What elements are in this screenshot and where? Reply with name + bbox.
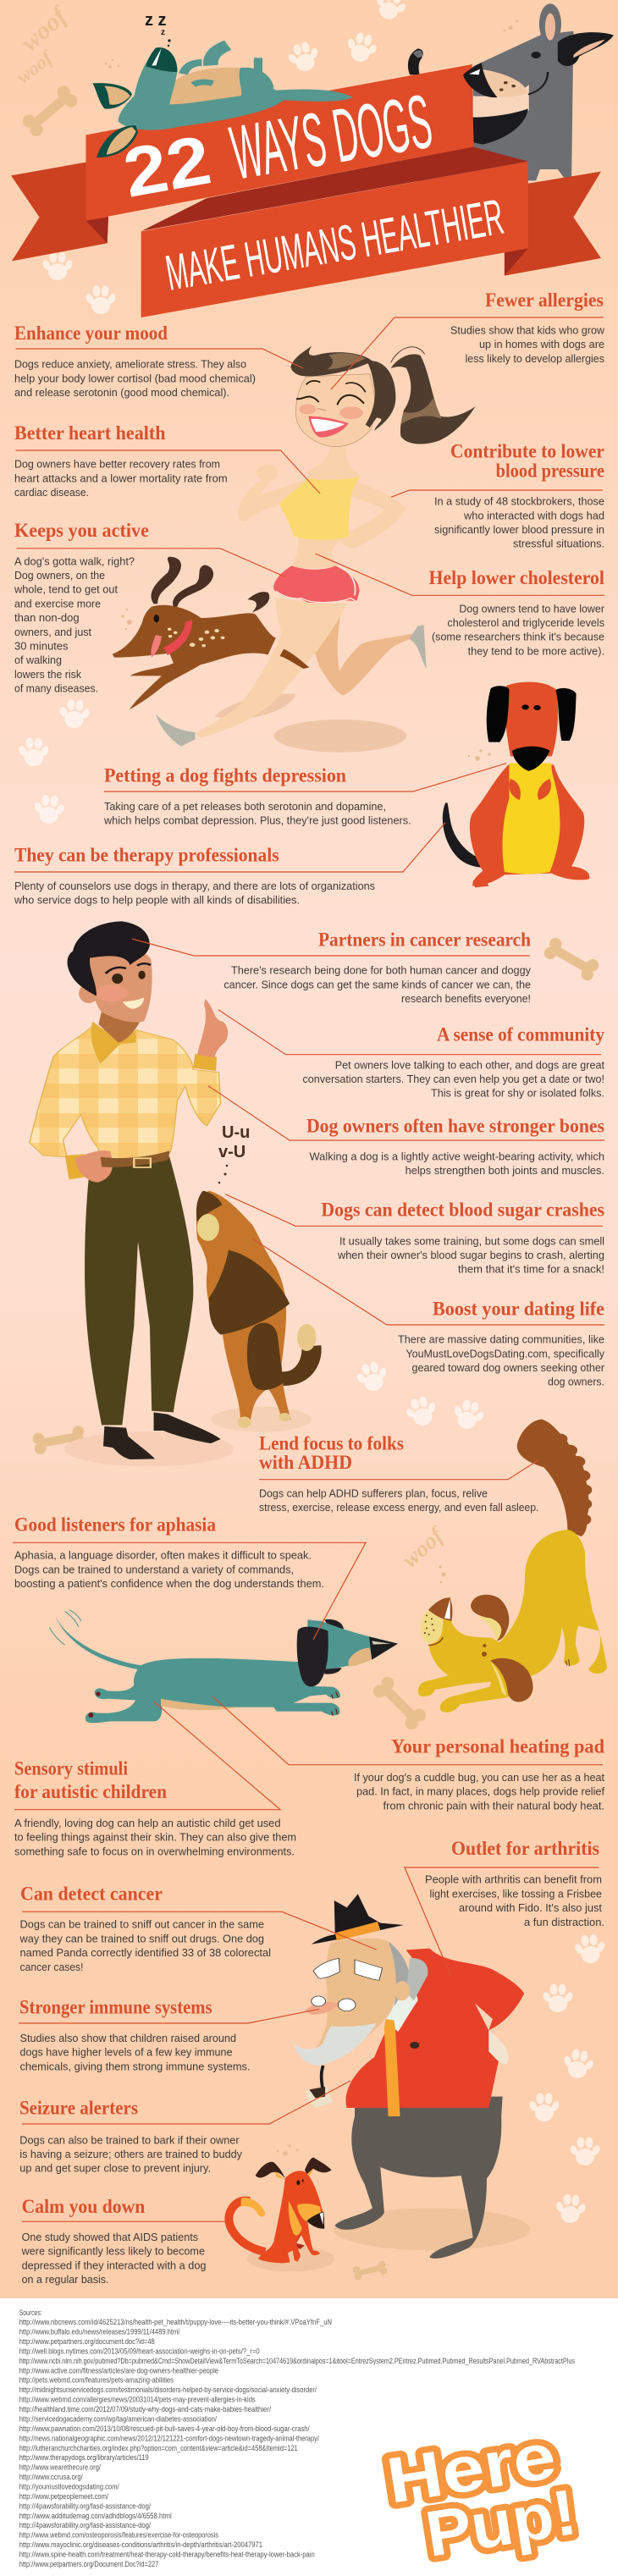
small dog ear inners	[273, 2169, 314, 2179]
collar	[91, 1022, 136, 1064]
section: contribute to lower blood pressure: Contribute to lower	[450, 441, 604, 462]
dog spots	[248, 1293, 272, 1318]
dog tail	[272, 1346, 312, 1379]
section: calm you down	[21, 2196, 225, 2286]
section: can detect cancer: Can detect cancer	[20, 1883, 163, 1904]
woof labels	[13, 1, 450, 1572]
section: boost your dating life: geared toward dog owners seeking other	[411, 1361, 605, 1374]
small dog body	[258, 2171, 324, 2263]
section: keeps you active: of many diseases.	[14, 682, 98, 695]
belt	[101, 1150, 169, 1167]
logo paw	[577, 2518, 597, 2535]
yellow dog tail	[517, 1420, 592, 1536]
illustration: teal dachshund	[49, 1610, 398, 1723]
illustration: man with plaid shirt	[30, 921, 234, 1466]
footer background	[0, 2298, 618, 2576]
logo: here pup	[382, 2420, 597, 2571]
hand on hip	[74, 1150, 113, 1183]
left ribbon tail	[11, 163, 108, 261]
logo word: here: Here	[382, 2420, 560, 2518]
section: stronger bones: helps strengthen both joints and muscles.	[406, 1164, 604, 1177]
section: can detect cancer: way they can be trained to sniff out drugs. One dog	[19, 1932, 264, 1944]
sleeping z letters: z	[161, 28, 165, 37]
section: can detect cancer	[19, 1883, 377, 1973]
illustration: yellow dog playing	[418, 1420, 607, 1713]
section: enhance your mood: Enhance your mood	[14, 323, 168, 344]
section: partners in cancer research: research benefits everyone!	[401, 992, 531, 1005]
section: enhance your mood: and release serotonin (good mood chemical).	[14, 386, 229, 399]
sources list: http://4pawsforability.org/fasd-assistance-dog/	[19, 2521, 151, 2530]
section: boost your dating life: YouMustLoveDogsDating.com, specifically	[406, 1347, 604, 1360]
sleeping z letters: z z	[145, 11, 167, 30]
section: your personal heating pad: Your personal heating pad	[391, 1736, 604, 1757]
eyes	[112, 974, 123, 984]
yellow dog body and head	[418, 1530, 607, 1713]
section: seizure alerters: Dogs can also be trained to bark if their owner	[19, 2133, 240, 2146]
dachshund front ear	[297, 1627, 328, 1686]
section: boost your dating life: dog owners.	[548, 1376, 604, 1388]
woof labels: woof	[13, 46, 58, 88]
decorative dots	[105, 19, 519, 2156]
section: keeps you active: Keeps you active	[14, 520, 149, 541]
section: lend focus to folks with adhd: Lend focus to folks	[259, 1432, 404, 1453]
head and ponytail	[290, 345, 476, 472]
section: outlet for arthritis: around with Fido. It's also just	[459, 1901, 602, 1914]
section: they can be therapy professionals: who service dogs to help people with all kinds of disabilities.	[14, 894, 300, 907]
title: 22: 22	[118, 121, 217, 212]
sources list: http://www.buffalo.edu/news/releases/1999/11/4489.html	[19, 2328, 179, 2337]
section: they can be therapy professionals	[14, 823, 445, 907]
bottom ribbon	[141, 162, 528, 317]
illustration: running brown dog	[113, 557, 309, 709]
old man pipe and hand	[322, 2066, 323, 2093]
section: sensory stimuli for autistic children: for autistic children	[14, 1781, 167, 1802]
section: outlet for arthritis: a fun distraction.	[524, 1916, 604, 1928]
section: good listeners for aphasia: Dogs can be trained to understand a variety of commands,	[14, 1563, 294, 1575]
section: calm you down: Calm you down	[22, 2196, 145, 2217]
icon: gray dog behind the banner	[408, 3, 614, 181]
section: contribute to lower blood pressure: significantly lower blood pressure in	[434, 523, 604, 536]
section: they can be therapy professionals: Plenty of counselors use dogs in therapy, and there are lots of organizations	[14, 880, 375, 892]
section: boost your dating life: There are massive dating communities, like	[398, 1333, 604, 1346]
section: enhance your mood	[14, 323, 303, 399]
sources list: http://www.spine-health.com/treatment/heat-therapy-cold-therapy/benefits-heat-therapy-lower-back-pain	[19, 2550, 315, 2560]
section: your personal heating pad: from chronic pain with their natural body heat.	[383, 1799, 604, 1812]
section: seizure alerters: up and get super close to prevent injury.	[19, 2162, 211, 2175]
section: help lower cholesterol: Dog owners tend to have lower	[459, 602, 605, 615]
section: petting a dog fights depression: Petting a dog fights depression	[104, 764, 346, 786]
small dog nose	[306, 2211, 324, 2229]
section: boost your dating life	[252, 1238, 605, 1388]
dog shadow	[212, 1407, 312, 1432]
section: keeps you active: than non-dog	[14, 611, 80, 624]
section: outlet for arthritis: light exercises, like tossing a Frisbee	[430, 1887, 602, 1900]
sleeping z letters	[145, 11, 171, 47]
small dog shadow	[247, 2246, 334, 2271]
section: help lower cholesterol	[315, 554, 605, 657]
dog paws	[238, 1416, 251, 1428]
section: better heart health	[14, 422, 320, 499]
sources list: http://www.petpartners.org/Document.Doc?id=227	[19, 2560, 158, 2569]
section: sensory stimuli for autistic children	[14, 1702, 296, 1857]
section: better heart health: cardiac disease.	[14, 486, 89, 499]
dachshund belly	[161, 1699, 237, 1710]
dachshund muzzle	[349, 1648, 372, 1666]
section: keeps you active: 30 minutes	[14, 640, 69, 652]
sources list: http://midnightsunservicedogs.com/testimonials/disorders-helped-by-service-dogs/social-anxiety-disorder/	[19, 2386, 317, 2395]
section: enhance your mood: Dogs reduce anxiety, ameliorate stress. They also	[14, 358, 246, 371]
dachshund paw marks	[88, 1691, 338, 1718]
section: contribute to lower blood pressure: In a study of 48 stockbrokers, those	[434, 495, 604, 508]
section: can detect cancer: named Panda correctly identified 33 of 38 colorectal	[20, 1946, 271, 1959]
sources list: http://www.webmd.com/osteoporosis/features/exercise-for-osteoporosis	[19, 2531, 218, 2540]
section: good listeners for aphasia: Good listeners for aphasia	[14, 1514, 216, 1535]
section: stronger bones: Dog owners often have stronger bones	[306, 1115, 604, 1136]
section: keeps you active: Dog owners, on the	[14, 569, 105, 582]
section: can detect cancer: cancer cases!	[20, 1961, 83, 1973]
logo word: pup: Pup!	[421, 2476, 581, 2571]
section: a sense of community	[218, 1010, 604, 1100]
banner ribbons	[11, 64, 601, 317]
section: seizure alerters: is having a seizure; others are trained to buddy	[19, 2148, 242, 2160]
sources list: http://www.mayoclinic.org/diseases-conditions/arthritis/in-depth/arthritis/art-20047971	[19, 2540, 262, 2550]
small dog ear flap	[289, 2201, 302, 2236]
small dog ears	[256, 2157, 332, 2178]
section: lend focus to folks with adhd: Dogs can help ADHD sufferers plan, focus, relive	[259, 1487, 488, 1499]
section: blood sugar crashes	[225, 1194, 604, 1276]
section: help lower cholesterol: they tend to be more active).	[468, 644, 604, 657]
section: sensory stimuli for autistic children: Sensory stimuli	[14, 1758, 129, 1779]
sources list: http://pets.webmd.com/features/pets-amazing-abilities	[19, 2376, 174, 2386]
section: calm you down: depressed if they interacted with a dog	[22, 2259, 206, 2271]
section: contribute to lower blood pressure: stressful situations.	[513, 538, 604, 550]
sniff marks	[218, 1123, 250, 1183]
section: stronger immune systems	[19, 1996, 319, 2072]
dachshund back ear pieces	[324, 1619, 344, 1674]
section: a sense of community: Pet owners love talking to each other, and dogs are great	[335, 1058, 604, 1071]
woof labels: woof	[16, 1, 74, 57]
section: stronger immune systems: Stronger immune systems	[19, 1996, 212, 2017]
dachshund tail	[55, 1615, 141, 1670]
illustration: sniffing dog	[196, 1191, 316, 1432]
small dog tail	[229, 2201, 265, 2252]
section: good listeners for aphasia: Aphasia, a language disorder, often makes it difficult to speak.	[14, 1549, 312, 1562]
old man trousers and legs	[335, 2097, 503, 2259]
illustration: sitting red dog	[443, 682, 589, 887]
dachshund nose	[369, 1636, 398, 1660]
connecting fold	[142, 146, 528, 231]
section: stronger bones: Walking a dog is a lightly active weight-bearing activity, which	[310, 1150, 604, 1162]
old man beard	[294, 2023, 377, 2066]
section: blood sugar crashes: them that it's time for a snack!	[458, 1263, 604, 1276]
left ribbon fold	[86, 218, 108, 243]
section: calm you down: on a regular basis.	[22, 2273, 109, 2286]
section: partners in cancer research	[132, 929, 531, 1005]
old man hat	[312, 1894, 404, 1944]
title	[118, 80, 507, 301]
sources list: http://well.blogs.nytimes.com/2013/05/09/heart-association-weighs-in-on-pets/?_r=0	[19, 2347, 260, 2356]
icon: gray dog muzzle	[463, 63, 548, 145]
section: partners in cancer research: cancer. Since dogs can get the same kinds of cancer we can, the	[223, 978, 531, 990]
illustration: jogging woman	[156, 345, 476, 753]
section: fewer allergies: up in homes with dogs are	[479, 338, 604, 350]
section: a sense of community: A sense of community	[437, 1023, 604, 1045]
section: fewer allergies: Fewer allergies	[485, 290, 604, 311]
section: fewer allergies	[331, 290, 605, 389]
section: sensory stimuli for autistic children: to feeling things against their skin. They can also give them	[14, 1831, 296, 1844]
right ribbon fold	[505, 248, 528, 276]
section: calm you down: One study showed that AIDS patients	[22, 2231, 198, 2243]
sources list: http://lutheranchurchcharities.org/index.php?option=com_content&view=article&id=458&Itemid=121	[19, 2444, 298, 2453]
top ribbon	[86, 64, 474, 221]
section: blood sugar crashes: It usually takes some training, but some dogs can smell	[339, 1234, 604, 1247]
section: outlet for arthritis: Outlet for arthritis	[451, 1838, 599, 1859]
sources list: http://www.additudemag.com/adhdblogs/4/6558.html	[19, 2512, 172, 2521]
dachshund head	[307, 1619, 398, 1669]
section: better heart health: Dog owners have better recovery rates from	[14, 458, 220, 471]
sources list: http://www.pawnation.com/2013/10/08/rescued-pit-bull-saves-4-year-old-boy-from-blood-sugar-crash/	[19, 2424, 310, 2434]
section: contribute to lower blood pressure: blood pressure	[496, 460, 604, 481]
section: seizure alerters: Seizure alerters	[19, 2098, 138, 2119]
sources list: http://www.nbcnews.com/id/4625213/ns/health-pet_health/t/puppy-love----its-better-you-think/#.VPoaYfnF_uN	[19, 2318, 332, 2327]
section: petting a dog fights depression	[103, 764, 506, 827]
section: sensory stimuli for autistic children: A friendly, loving dog can help an autistic child get used	[14, 1817, 281, 1829]
section: outlet for arthritis	[405, 1838, 604, 1977]
section: seizure alerters	[19, 2081, 350, 2175]
old man shadow	[333, 2208, 530, 2250]
shoes	[103, 1426, 155, 1459]
sources list: http://www.active.com/fitness/articles/are-dog-owners-healthier-people	[19, 2366, 218, 2375]
section: stronger immune systems: dogs have higher levels of a few key immune	[20, 2046, 232, 2059]
section: blood sugar crashes: Dogs can detect blood sugar crashes	[321, 1200, 604, 1221]
old man shirt and tie	[384, 1987, 417, 2032]
old man nose and glasses	[306, 2002, 339, 2015]
sources list: http://healthland.time.com/2012/07/09/study-why-dogs-and-cats-make-babies-healthier/	[19, 2405, 271, 2414]
section: contribute to lower blood pressure: who interacted with dogs had	[463, 509, 604, 521]
section: partners in cancer research: Partners in cancer research	[318, 929, 531, 950]
small dog far leg	[288, 2233, 305, 2249]
section: outlet for arthritis: People with arthritis can benefit from	[425, 1873, 602, 1886]
section: stronger bones	[208, 1086, 604, 1177]
sources list: http://4pawsforability.org/fasd-assistance-dog/	[19, 2502, 151, 2511]
section: sensory stimuli for autistic children: something safe to focus on in overwhelming environments.	[14, 1845, 295, 1857]
section: your personal heating pad: If your dog's a cuddle bug, you can use her as a heat	[354, 1771, 604, 1784]
sources list: http://www.wearethecure.org/	[19, 2463, 101, 2473]
section: help lower cholesterol: Help lower cholesterol	[428, 567, 604, 588]
section: keeps you active	[14, 520, 285, 695]
sources list: http://www.ccrusa.org/	[19, 2473, 83, 2482]
section: better heart health: heart attacks and a lower mortality rate from	[14, 472, 228, 484]
section: your personal heating pad	[212, 1696, 604, 1812]
smile	[123, 997, 144, 1009]
section: petting a dog fights depression: which helps combat depression. Plus, they're just good listeners.	[103, 814, 411, 827]
section: keeps you active: owners, and just	[14, 626, 91, 638]
small dog eyes	[296, 2179, 304, 2185]
section: your personal heating pad: pad. In fact, in many places, dogs help provide relief	[356, 1785, 604, 1798]
icon: sleeping teal dog	[92, 45, 353, 157]
dachshund wag marks	[49, 1610, 81, 1645]
section: contribute to lower blood pressure	[391, 441, 604, 550]
thumb hand	[197, 999, 228, 1057]
section: good listeners for aphasia: boosting a patient's confidence when the dog understands them.	[14, 1577, 324, 1590]
section: keeps you active: whole, tend to get out	[14, 583, 118, 596]
shadow under man	[64, 1431, 234, 1466]
sniff marks: U-u	[222, 1123, 250, 1142]
section: lend focus to folks with adhd: with ADHD	[259, 1452, 352, 1473]
section: keeps you active: lowers the risk	[14, 668, 81, 681]
body	[156, 447, 427, 753]
old man jacket	[346, 1949, 524, 2108]
old man face	[294, 1939, 397, 2060]
section: a sense of community: This is great for shy or isolated folks.	[431, 1087, 604, 1100]
sources list: http://www.therapydogs.org/library/articles/119	[19, 2453, 149, 2463]
section: keeps you active: of walking	[14, 654, 62, 666]
cuff and arm	[193, 1054, 217, 1071]
sources list: http://www.petpeoplemeet.com/	[19, 2492, 108, 2502]
section: good listeners for aphasia	[13, 1514, 366, 1640]
section: stronger immune systems: Studies also show that children raised around	[20, 2032, 236, 2044]
sources list	[19, 2308, 575, 2569]
illustration: small red dog	[229, 2157, 334, 2271]
sources list: Sources:	[19, 2308, 42, 2318]
sources list: http://news.nationalgeographic.com/news/2012/12/121221-comfort-dogs-newtown-tragedy-animal-therapy/	[19, 2434, 319, 2443]
shirt	[30, 1026, 221, 1166]
section: better heart health: Better heart health	[14, 422, 166, 444]
small dog muzzle	[297, 2204, 321, 2222]
sources list: http://www.webmd.com/allergies/news/20031014/pets-may-prevent-allergies-in-kids	[19, 2396, 256, 2405]
dog ear and muzzle	[209, 1250, 290, 1335]
dachshund body	[86, 1658, 340, 1723]
section: help lower cholesterol: (some researchers think it's because	[432, 631, 604, 643]
section: stronger immune systems: chemicals, giving them strong immune systems.	[20, 2060, 251, 2072]
section: enhance your mood: help your body lower cortisol (bad mood chemical)	[14, 372, 256, 384]
sources list: http://youmustlovedogsdating.com/	[19, 2482, 119, 2492]
section: a sense of community: conversation starters. They can even help you get a date or two!	[303, 1073, 604, 1085]
section: lend focus to folks with adhd: stress, exercise, release excess energy, and even fall asleep.	[259, 1501, 538, 1514]
old man eyebrows	[313, 1958, 339, 1978]
right ribbon tail	[505, 172, 601, 276]
section: fewer allergies: less likely to develop allergies	[466, 352, 604, 365]
section: help lower cholesterol: cholesterol and triglyceride levels	[447, 616, 604, 629]
section: can detect cancer: Dogs can be trained to sniff out cancer in the same	[20, 1918, 264, 1931]
section: blood sugar crashes: when their owner's blood sugar begins to crash, alerting	[337, 1249, 604, 1261]
trousers	[85, 1157, 193, 1425]
section: keeps you active: A dog's gotta walk, right?	[14, 554, 135, 567]
section: partners in cancer research: There's research being done for both human cancer and doggy	[231, 964, 531, 977]
section: petting a dog fights depression: Taking care of a pet releases both serotonin and dopamine,	[104, 800, 386, 813]
illustration: old man with pipe	[294, 1894, 530, 2259]
hair	[68, 921, 150, 996]
sniff marks: v-U	[218, 1143, 246, 1161]
section: calm you down: were significantly less likely to become	[21, 2245, 205, 2258]
sources list: http://www.petpartners.org/document.doc?id=48	[19, 2337, 155, 2347]
dog body	[196, 1191, 291, 1424]
section: keeps you active: and exercise more	[14, 597, 101, 610]
section: boost your dating life: Boost your dating life	[433, 1298, 604, 1319]
woof labels: woof	[397, 1521, 450, 1572]
section: lend focus to folks with adhd	[259, 1432, 538, 1514]
section: they can be therapy professionals: They can be therapy professionals	[14, 845, 279, 866]
neck	[98, 1007, 140, 1043]
face	[89, 947, 152, 1023]
sources list: http://servicedogacademy.com/wp/tag/american-diabetes-association/	[19, 2414, 217, 2424]
section: fewer allergies: Studies show that kids who grow	[450, 323, 605, 336]
